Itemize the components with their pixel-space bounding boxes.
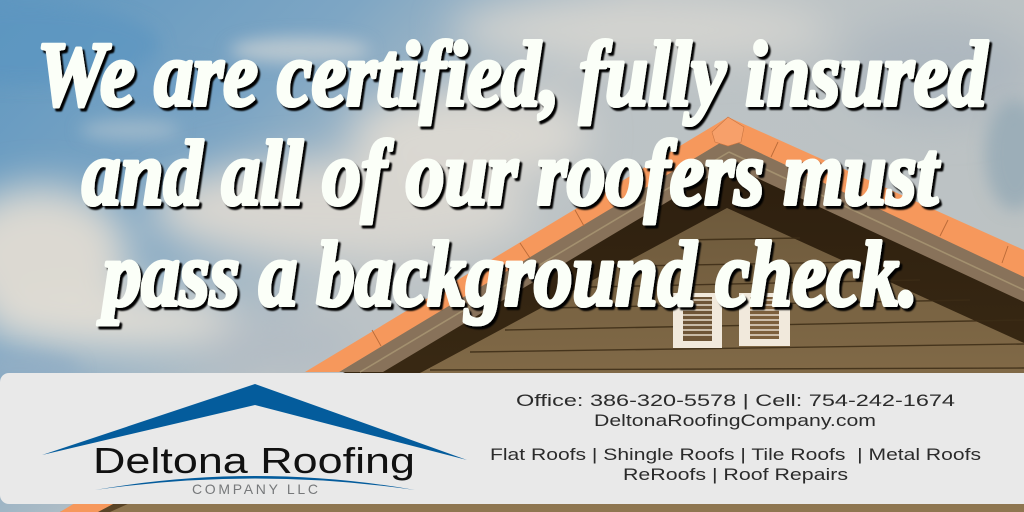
services line 2: ReRoofs | Roof Repairs xyxy=(623,466,848,484)
logo wordmark: Deltona Roofing xyxy=(93,440,415,481)
left gable vent xyxy=(673,293,722,348)
contact panel xyxy=(0,373,1024,504)
brown fascia trim xyxy=(339,134,1024,372)
logo xyxy=(42,384,467,497)
website: DeltonaRoofingCompany.com xyxy=(594,412,876,430)
siding xyxy=(110,208,1024,512)
logo swoosh xyxy=(95,476,415,490)
logo subtitle: COMPANY LLC xyxy=(192,481,318,497)
house gable and roof xyxy=(60,117,1024,512)
gable shadow under eaves xyxy=(60,150,1024,512)
right gable vent xyxy=(739,293,790,346)
logo roof mark xyxy=(42,384,467,460)
roof below panel xyxy=(60,503,115,512)
ridge cap xyxy=(712,117,744,146)
orange roof edge tiles xyxy=(305,117,1024,372)
headline xyxy=(37,23,989,325)
phone numbers: Office: 386-320-5578 | Cell: 754-242-1674 xyxy=(516,392,955,410)
services line 1: Flat Roofs | Shingle Roofs | Tile Roofs | Metal Roofs xyxy=(490,446,981,464)
